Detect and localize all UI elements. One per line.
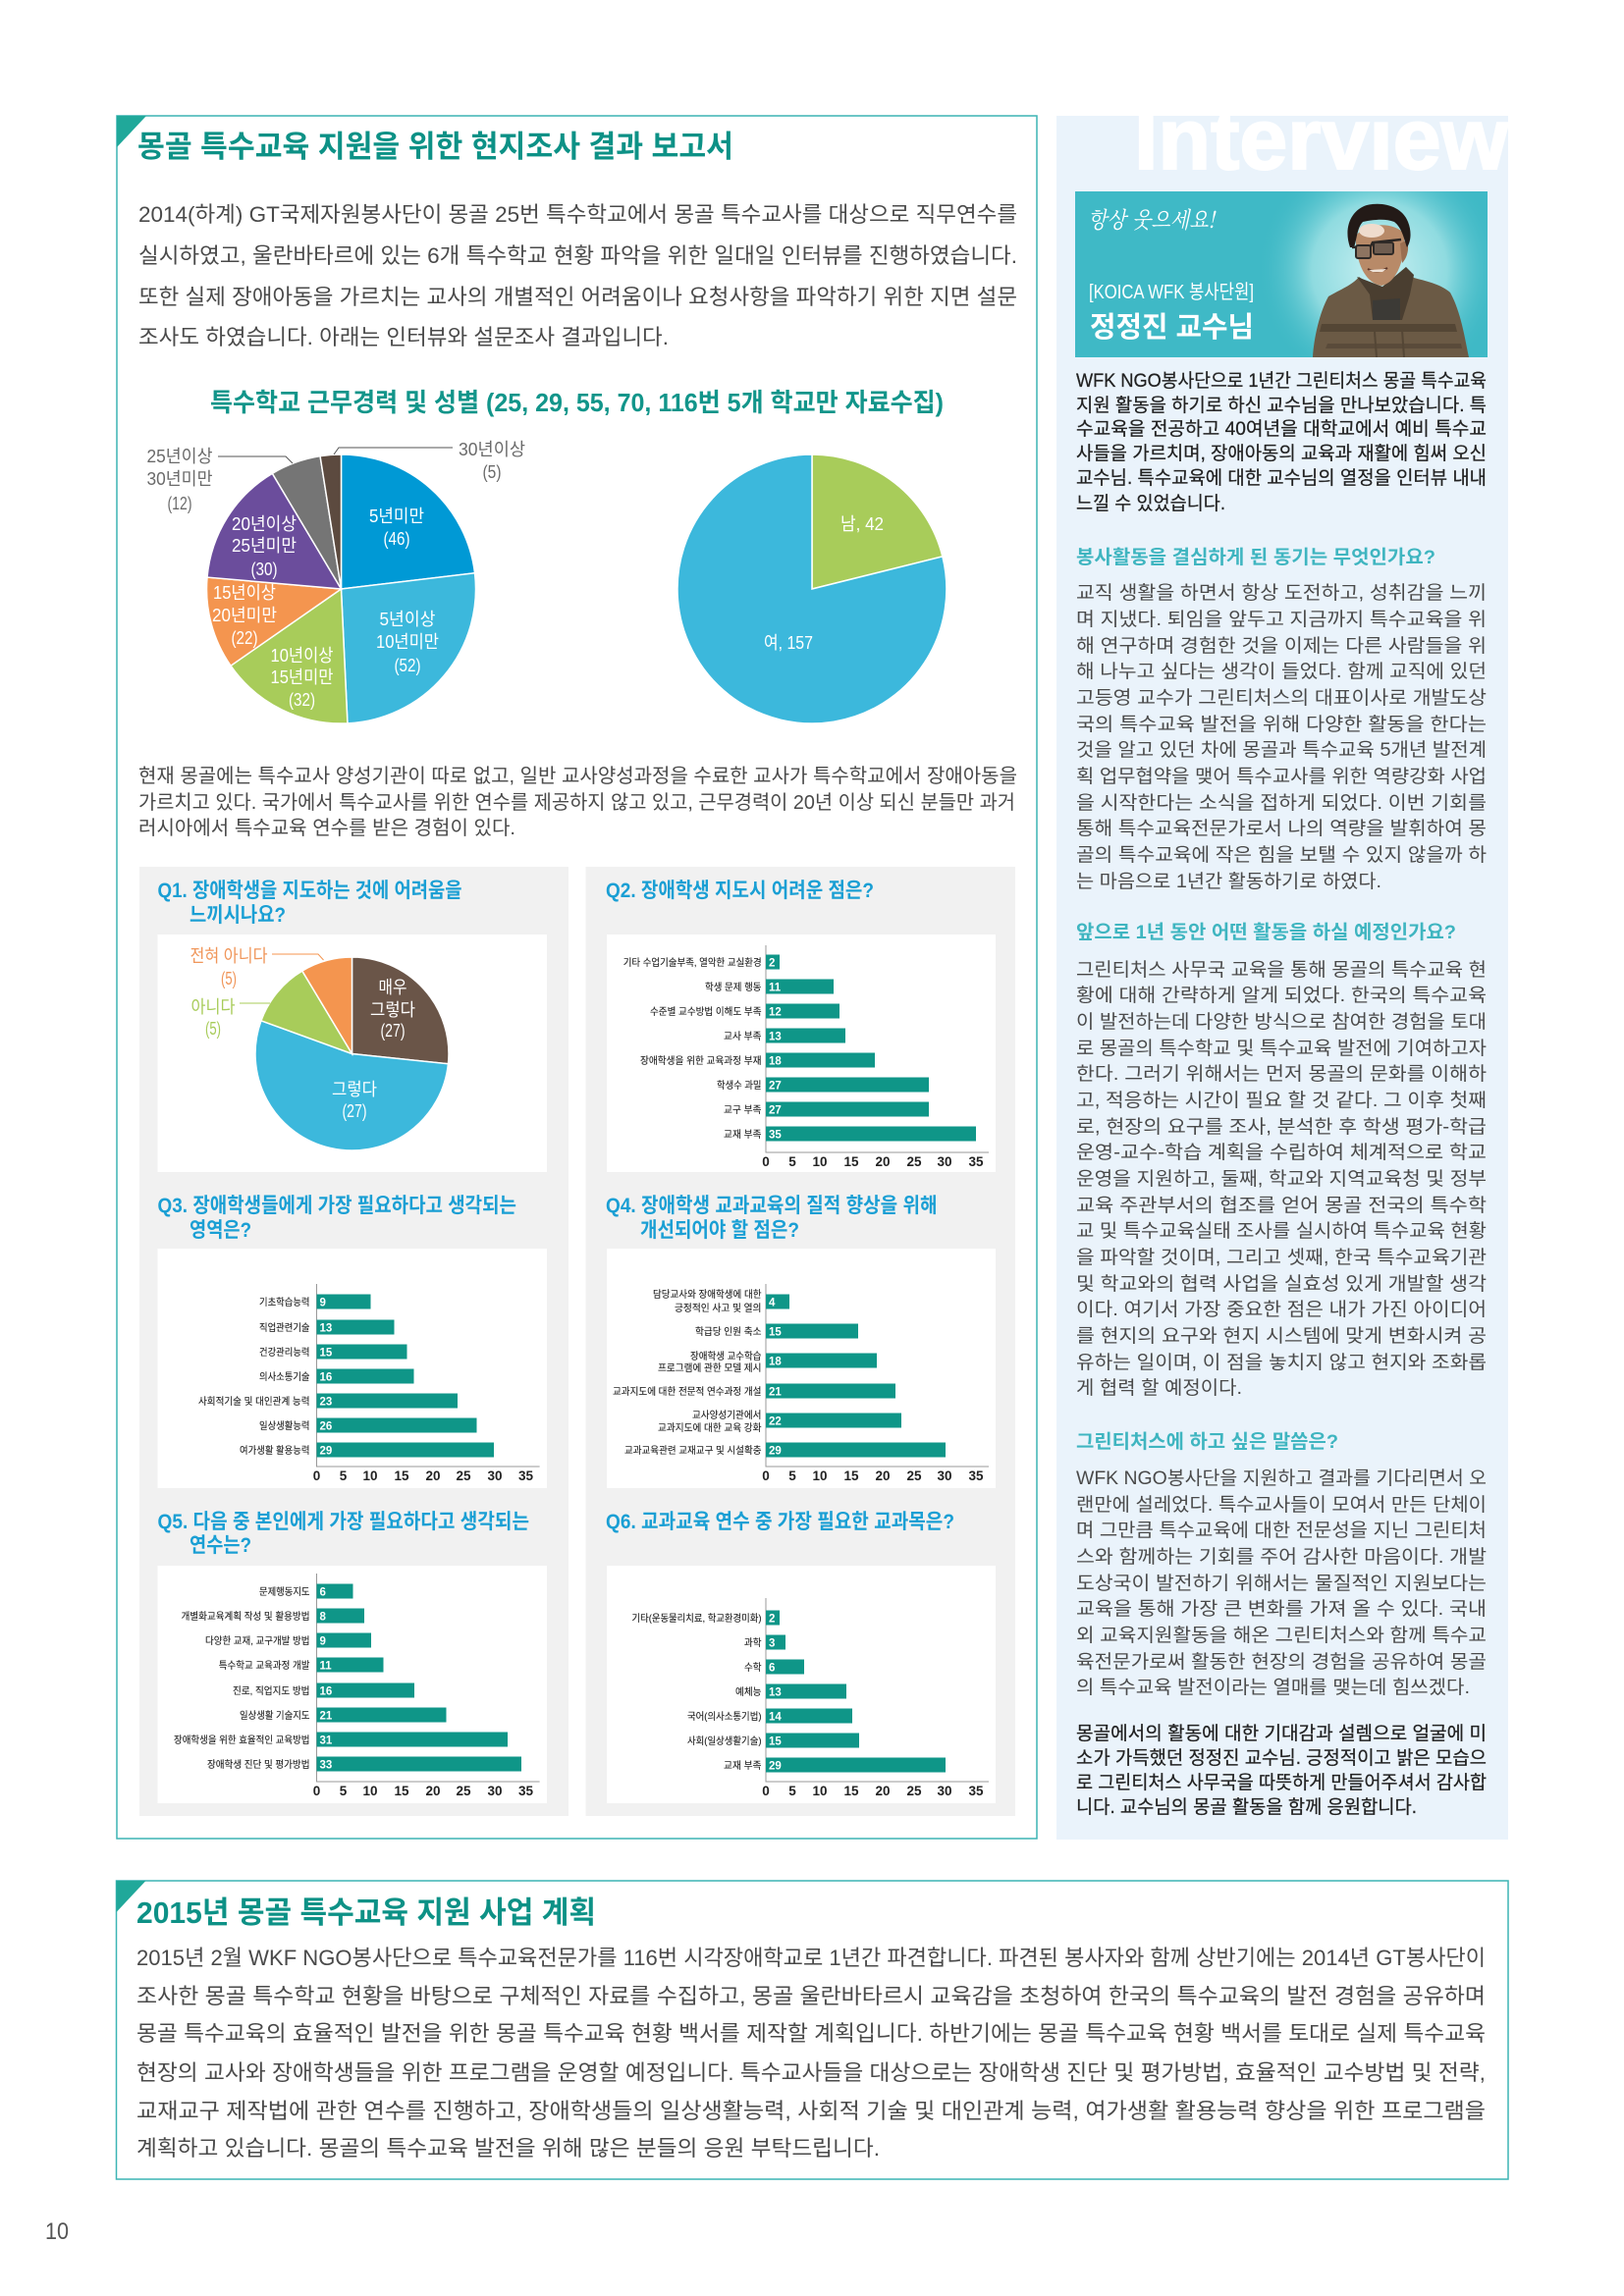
heading: message question: 그린티처스에 하고 싶은 말씀은? [1076, 1431, 1338, 1453]
text block: plans answer: 교육 주관부서의 협조를 얻어 몽골 전국의 특수학 [1076, 1195, 1487, 1216]
bar chart: Q6: 교재 부족 [724, 1760, 762, 1772]
bar chart: Q3: 16 [320, 1372, 332, 1384]
pie chart: years of service: 25년미만 [232, 536, 297, 556]
text block: motivation answer: 해 연구하며 경험한 것을 이제는 다른 사람들을 위 [1076, 635, 1487, 657]
bar chart: Q3: 15 [320, 1347, 333, 1359]
text block: motivation answer: 는 마음으로 1년간 활동하기로 하였다. [1076, 871, 1381, 892]
pie chart: difficulty: 전혀 아니다 [190, 946, 268, 966]
text block: plans answer: 그린티처스 사무국 교육을 통해 몽골의 특수교육 현 [1076, 959, 1487, 981]
pie chart: years of service: (22) [232, 628, 257, 648]
pie chart: years of service: (12) [167, 494, 192, 513]
bar chart: Q6: 15 [769, 1735, 782, 1747]
pie chart: difficulty: 아니다 [190, 997, 236, 1017]
text block: motivation answer: 것을 알고 있던 차에 몽골과 특수교육 5개년 발전계 [1076, 739, 1487, 761]
icon: portrait of professor [1313, 204, 1469, 357]
panel: interview sidebar [1056, 90, 1509, 1840]
bar chart: Q6: 5 [788, 1784, 796, 1798]
bar chart: Q6: 과학 [744, 1637, 762, 1649]
text block: plans answer: 이 발전하는데 다양한 방식으로 참여한 경험을 토대 [1076, 1011, 1487, 1033]
pie chart: years of service: 10년미만 [376, 632, 439, 652]
pie chart: gender: 남, 42 [840, 514, 884, 534]
bar chart: Q4: 18 [769, 1357, 782, 1368]
pie chart: years of service [147, 440, 525, 723]
bar chart: Q3: 건강관리능력 [259, 1347, 310, 1359]
bar chart: Q4: 29 [769, 1445, 782, 1457]
bar chart: Q4: 4 [769, 1298, 776, 1309]
bar chart: Q3: 15 [394, 1468, 409, 1483]
bar chart: Q2: 10 [812, 1154, 828, 1169]
text block: plans answer [1076, 959, 1487, 1399]
bar chart: Q3: 29 [320, 1445, 332, 1457]
bar chart: Q5: 다양한 교재, 교구개발 방법 [205, 1635, 310, 1647]
bar chart: Q3: 직업관련기술 [259, 1321, 310, 1334]
text block: interview intro: WFK NGO봉사단으로 1년간 그린티처스 몽골 특수교육 [1076, 370, 1487, 392]
bar chart: Q6: 25 [906, 1784, 922, 1798]
bar chart: Q4: 학급당 인원 축소 [695, 1326, 762, 1338]
text block: context paragraph: 러시아에서 특수교육 연수를 받은 경험이 있다. [138, 817, 515, 839]
text block: interview intro: 교수님. 특수교육에 대한 교수님의 열정을 인터뷰 내내 [1076, 467, 1487, 489]
bar chart: Q2 [623, 945, 989, 1169]
text block: message answer: 랜만에 설레었다. 특수교사들이 모여서 만든 단체이 [1076, 1494, 1487, 1516]
text block: interview intro: 지원 활동을 하기로 하신 교수님을 만나보았습니다. 특 [1076, 395, 1487, 416]
text block: plan details [136, 1946, 1486, 2161]
bar chart: Q3: 30 [487, 1468, 503, 1483]
question text [157, 1511, 529, 1557]
pie chart: years of service: (32) [289, 690, 315, 710]
bar chart: Q6 [632, 1598, 989, 1798]
bar chart: Q3: 13 [320, 1323, 332, 1335]
text block: motivation answer: 통해 특수교육전문가로서 나의 역량을 발휘하여 몽 [1076, 818, 1487, 839]
pie chart: gender [677, 454, 947, 723]
text block: plan details: 교재교구 제작법에 관한 연수를 진행하고, 장애학생들의 일상생활능력, 사회적 기술 및 대인관계 능력, 여가생활 활용능력 향상을 위한 프로그램을 [136, 2099, 1486, 2123]
bar chart: Q4: 30 [937, 1468, 952, 1483]
text block: message answer: 의 특수교육 발전이라는 열매를 맺는데 힘쓰겠다. [1076, 1677, 1470, 1698]
pie chart: years of service: 30년미만 [147, 469, 212, 489]
text block: message answer: 교육을 통해 가장 큰 변화를 가져 올 수 있다. 국내 [1076, 1598, 1487, 1620]
bar chart: Q2: 25 [906, 1154, 922, 1169]
bar chart: Q3: 여가생활 활용능력 [240, 1444, 310, 1457]
bar chart: Q5: 10 [362, 1784, 378, 1798]
text block: interview intro: 사들을 가르치며, 장애아동의 교육과 재활에 힘써 오신 [1076, 443, 1487, 464]
text block: intro: 2014(하계) GT국제자원봉사단이 몽골 25번 특수학교에서 몽골 특수교사를 대상으로 직무연수를 [138, 202, 1017, 227]
bar chart: Q5: 5 [340, 1784, 348, 1798]
bar chart: Q6: 기타(운동물리치료, 학교환경미화) [632, 1612, 762, 1625]
watermark: Interview: Interview [1134, 90, 1509, 187]
bar chart: Q4: 긍정적인 사고 및 열의 [675, 1303, 762, 1314]
bar chart: Q4: 5 [788, 1468, 796, 1483]
bar chart: Q5: 35 [518, 1784, 533, 1798]
text block: plans answer: 이다. 여기서 가장 중요한 점은 내가 가진 아이디어 [1076, 1299, 1487, 1320]
bar chart: Q5: 장애학생을 위한 효율적인 교육방법 [174, 1734, 310, 1746]
text block: plans answer: 한다. 그러기 위해서는 먼저 몽골의 문화를 이해하 [1076, 1063, 1487, 1085]
question text: Q1. 장애학생을 지도하는 것에 어려움을 [157, 880, 461, 902]
pie chart: years of service: 25년이상 [147, 447, 212, 466]
bar chart: Q6: 10 [812, 1784, 828, 1798]
bar chart: Q5: 특수학교 교육과정 개발 [219, 1660, 310, 1672]
bar chart: Q5: 9 [320, 1635, 326, 1647]
question text: Q3. 장애학생들에게 가장 필요하다고 생각되는 [157, 1195, 516, 1217]
bar chart: Q3: 20 [425, 1468, 441, 1483]
text block: closing note: 몽골에서의 활동에 대한 기대감과 설렘으로 얼굴에 미 [1076, 1723, 1487, 1744]
bar chart: Q2: 18 [769, 1056, 782, 1068]
text block: plans answer: 고, 적응하는 시간이 필요 할 것 같다. 그 이후 첫째 [1076, 1090, 1487, 1111]
bar chart: Q3 [198, 1284, 540, 1483]
bar chart: Q3: 5 [340, 1468, 348, 1483]
text block: interview intro: 느낄 수 있었습니다. [1076, 493, 1225, 514]
text block: plans answer: 로 몽골의 특수학교 및 특수교육 발전에 기여하고자 [1076, 1038, 1487, 1059]
bar chart: Q4: 10 [812, 1468, 828, 1483]
bar chart: Q4: 담당교사와 장애학생에 대한 [653, 1289, 762, 1301]
bar chart: Q6: 35 [968, 1784, 984, 1798]
pie chart: years of service: (30) [251, 560, 277, 579]
bar chart: Q5: 16 [320, 1686, 332, 1698]
bar chart: Q6: 3 [769, 1637, 775, 1649]
question text: Q2. 장애학생 지도시 어려운 점은? [606, 880, 874, 902]
pie chart: difficulty: (5) [221, 969, 237, 988]
bar chart: Q3: 일상생활능력 [259, 1419, 310, 1432]
heading: plan title: 2015년 몽골 특수교육 지원 사업 계획 [136, 1896, 596, 1930]
bar chart: Q2: 장애학생을 위한 교육과정 부재 [640, 1054, 762, 1067]
bar chart: Q6: 0 [762, 1784, 770, 1798]
bar chart: Q5: 문제행동지도 [259, 1586, 310, 1598]
text block: intro: 실시하였고, 울란바타르에 있는 6개 특수학교 현황 파악을 위한 일대일 인터뷰를 진행하였습니다. [138, 243, 1017, 268]
bar chart: Q2: 27 [769, 1105, 782, 1117]
bar chart: Q5: 25 [456, 1784, 471, 1798]
heading: report title: 몽골 특수교육 지원을 위한 현지조사 결과 보고서 [137, 130, 733, 164]
question text: Q5. 다음 중 본인에게 가장 필요하다고 생각되는 [157, 1511, 529, 1533]
bar chart: Q2: 학생수 과밀 [717, 1080, 762, 1092]
bar chart: Q4: 15 [769, 1327, 782, 1339]
bar chart: Q2: 13 [769, 1031, 782, 1042]
bar chart: Q6: 13 [769, 1686, 782, 1698]
bar chart: Q5: 개별화교육계획 작성 및 활용방법 [182, 1610, 310, 1623]
question text [606, 1195, 937, 1242]
bar chart: Q6: 국어(의사소통기법) [687, 1711, 762, 1723]
bar chart: Q5: 21 [320, 1710, 333, 1722]
text block: intro [138, 202, 1017, 349]
text block: context paragraph: 현재 몽골에는 특수교사 양성기관이 따로 없고, 일반 교사양성과정을 수료한 교사가 특수학교에서 장애아동을 [138, 765, 1017, 787]
bar chart: Q5: 일상생활 기술지도 [240, 1709, 310, 1722]
text block: intro: 조사도 하였습니다. 아래는 인터뷰와 설문조사 결과입니다. [138, 325, 669, 349]
text block: plans answer: 및 학교와의 협력 사업을 실효성 있게 개발할 생각 [1076, 1273, 1487, 1295]
bar chart: Q2: 11 [769, 982, 782, 993]
pie chart: years of service: (46) [383, 529, 410, 549]
text block: motivation answer: 을 시작한다는 소식을 접하게 되었다. 이번 기회를 [1076, 792, 1487, 814]
bar chart: Q5: 0 [313, 1784, 320, 1798]
text block: closing note: 니다. 교수님의 몽골 활동을 함께 응원합니다. [1076, 1796, 1417, 1818]
pie chart: years of service: (52) [395, 656, 420, 675]
role label: [KOICA WFK 봉사단원] [1089, 281, 1254, 303]
question text [157, 880, 461, 927]
panel: Q1 [139, 867, 568, 1816]
pie chart: years of service: (5) [483, 462, 501, 482]
text block: intro: 또한 실제 장애아동을 가르치는 교사의 개별적인 어려움이나 요청사항을 파악하기 위한 지면 설문 [138, 285, 1017, 309]
text block: message answer [1076, 1468, 1487, 1698]
pie chart: years of service: 5년이상 [379, 610, 436, 629]
bar chart: Q4: 교과교육관련 교재교구 및 시설확충 [624, 1445, 762, 1457]
bar chart: Q2: 수준별 교수방법 이해도 부족 [650, 1005, 762, 1018]
bar chart: Q2: 15 [843, 1154, 859, 1169]
bar chart: Q2: 학생 문제 행동 [705, 982, 762, 993]
pie chart: difficulty: (27) [342, 1101, 367, 1121]
question text: 개선되어야 할 점은? [640, 1219, 799, 1242]
text block: motivation answer: 획 업무협약을 맺어 특수교사를 위한 역량강화 사업 [1076, 766, 1487, 787]
text block: interview intro: 수교육을 전공하고 40여년을 대학교에서 예비 특수교 [1076, 418, 1487, 440]
text block: motivation answer: 교직 생활을 하면서 항상 도전하고, 성취감을 느끼 [1076, 582, 1487, 604]
text block: message answer: 스와 함께하는 기회를 주어 감사한 마음이다. 개발 [1076, 1546, 1487, 1568]
text block: plans answer: 황에 대해 간략하게 알게 되었다. 한국의 특수교육 [1076, 985, 1487, 1006]
text block: plans answer: 로, 현장의 요구를 조사, 분석한 후 학생 평가-학급 [1076, 1116, 1487, 1138]
handwritten quote: 항상 웃으세요! [1088, 202, 1217, 235]
text block: closing note [1076, 1723, 1487, 1818]
bar chart: Q5: 11 [320, 1661, 332, 1673]
bar chart: Q5: 30 [487, 1784, 503, 1798]
bar chart: Q6: 2 [769, 1614, 775, 1626]
bar chart: Q6: 사회(일상생활기술) [687, 1735, 762, 1747]
bar chart: Q6: 20 [875, 1784, 891, 1798]
bar chart: Q6: 수학 [744, 1662, 762, 1674]
bar chart: Q3: 23 [320, 1396, 332, 1408]
bar chart: Q4: 프로그램에 관한 모델 제시 [658, 1362, 762, 1374]
bar chart: Q5: 장애학생 진단 및 평가방법 [207, 1759, 310, 1771]
bar chart: Q5: 31 [320, 1735, 333, 1747]
panel: Q2 [585, 867, 1015, 1816]
heading: motivation question: 봉사활동을 결심하게 된 동기는 무엇인가요? [1076, 547, 1435, 568]
text block: closing note: 로 그린티처스 사무국을 따뜻하게 만들어주셔서 감사합 [1076, 1772, 1487, 1793]
bar chart: Q4: 교과지도에 대한 전문적 연수과정 개설 [613, 1386, 762, 1398]
bar chart: Q2: 27 [769, 1080, 782, 1092]
bar chart: Q5: 33 [320, 1759, 332, 1771]
bar chart: Q2: 교구 부족 [724, 1104, 762, 1116]
pie chart: years of service: 15년이상 [213, 583, 276, 603]
text block: motivation answer: 골의 특수교육에 작은 힘을 보탤 수 있지 않을까 하 [1076, 844, 1487, 866]
text block: plan details: 계획하고 있습니다. 몽골의 특수교육 발전을 위해 많은 분들의 응원 부탁드립니다. [136, 2136, 880, 2161]
bar chart: Q4: 35 [968, 1468, 984, 1483]
text block: plans answer: 게 협력 할 예정이다. [1076, 1377, 1242, 1399]
pie chart: years of service: 15년미만 [271, 667, 334, 687]
bar chart: Q5: 진로, 직업지도 방법 [233, 1684, 310, 1697]
bar chart: Q3: 의사소통기술 [259, 1371, 310, 1383]
bar chart: Q2: 0 [762, 1154, 770, 1169]
bar chart: Q4: 교사양성기관에서 [692, 1410, 762, 1421]
pie chart: difficulty: (5) [205, 1019, 221, 1039]
text block: message answer: 육전문가로써 활동한 현장의 경험을 공유하여 몽골 [1076, 1651, 1487, 1673]
bar chart: Q6: 14 [769, 1712, 782, 1724]
bar chart: Q4: 0 [762, 1468, 770, 1483]
bar chart: Q3: 10 [362, 1468, 378, 1483]
text block: motivation answer [1076, 582, 1487, 892]
bar chart: Q3: 0 [313, 1468, 320, 1483]
question text: Q6. 교과교육 연수 중 가장 필요한 교과목은? [606, 1511, 954, 1533]
text block: plan details: 조사한 몽골 특수학교 현황을 바탕으로 구체적인 자료를 수집하고, 몽골 울란바타르시 교육감을 초청하여 한국의 특수교육의 발전 경험을 공유하며 [136, 1984, 1486, 2008]
text block: context paragraph [138, 765, 1017, 839]
bar chart: Q2: 2 [769, 958, 775, 970]
text block: closing note: 소가 가득했던 정정진 교수님. 긍정적이고 밝은 모습으 [1076, 1747, 1487, 1769]
bar chart: Q2: 20 [875, 1154, 891, 1169]
panel: Q5 [157, 1511, 547, 1803]
pie chart: difficulty [190, 946, 449, 1150]
question text: Q4. 장애학생 교과교육의 질적 향상을 위해 [606, 1195, 937, 1217]
pie chart: years of service: 20년미만 [212, 606, 277, 625]
bar chart: Q4: 교과지도에 대한 교육 강화 [658, 1422, 762, 1434]
bar chart: Q6: 15 [843, 1784, 859, 1798]
text block: plans answer: 을 파악할 것이며, 그리고 셋째, 한국 특수교육기관 [1076, 1247, 1487, 1268]
bar chart: Q2: 30 [937, 1154, 952, 1169]
text block: plans answer: 운영을 지원하고, 둘째, 학교와 지역교육청 및 정부 [1076, 1168, 1487, 1190]
text block: message answer: 외 교육지원활동을 해온 그린티처스와 함께 특수교 [1076, 1625, 1487, 1646]
bar chart: Q4: 25 [906, 1468, 922, 1483]
text block: plans answer: 운영-교수-학습 계획을 수립하여 체계적으로 학교 [1076, 1142, 1487, 1163]
pie chart: difficulty: 매우 [379, 978, 406, 997]
pie chart: years of service: 30년이상 [459, 440, 525, 459]
icon: corner triangle [116, 1881, 145, 1912]
bar chart: Q6: 29 [769, 1761, 782, 1773]
bar chart: Q5: 6 [320, 1586, 326, 1598]
bar chart: Q4: 15 [843, 1468, 859, 1483]
bar chart: Q3: 기초학습능력 [259, 1297, 310, 1308]
bar chart: Q5: 8 [320, 1612, 326, 1624]
panel: field survey report [117, 116, 1037, 1839]
bar chart: Q6: 30 [937, 1784, 952, 1798]
bar chart: Q6: 6 [769, 1663, 775, 1675]
pie chart: difficulty: 그렇다 [370, 1000, 415, 1020]
bar chart: Q3: 25 [456, 1468, 471, 1483]
text block: motivation answer: 해 나누고 싶다는 생각이 들었다. 함께 교직에 있던 [1076, 661, 1487, 682]
panel: Q4 [606, 1195, 996, 1488]
bar chart: Q4: 21 [769, 1386, 782, 1398]
bar chart: Q2: 교사 부족 [724, 1031, 762, 1042]
text block: motivation answer: 며 지냈다. 퇴임을 앞두고 지금까지 특수교육을 위 [1076, 609, 1487, 630]
heading: plans question: 앞으로 1년 동안 어떤 활동을 하실 예정인가요? [1076, 922, 1456, 943]
text block: plans answer: 교 및 특수교육실태 조사를 실시하여 특수교육 현황 [1076, 1220, 1487, 1242]
bar chart: Q5 [174, 1574, 540, 1798]
bar chart: Q3: 사회적기술 및 대인관계 능력 [198, 1396, 310, 1408]
panel: Q3 [157, 1195, 547, 1488]
bar chart: Q2: 교재 부족 [724, 1129, 762, 1141]
bar chart: Q4: 22 [769, 1415, 782, 1427]
bar chart: Q4 [613, 1284, 989, 1483]
bar chart: Q2: 기타 수업기술부족, 열악한 교실환경 [623, 956, 762, 969]
bar chart: Q4: 20 [875, 1468, 891, 1483]
pie chart: years of service: 5년미만 [369, 507, 424, 526]
pie chart: gender: 여, 157 [764, 633, 813, 653]
text block: message answer: 며 그만큼 특수교육에 대한 전문성을 지닌 그린티처 [1076, 1520, 1487, 1541]
bar chart: Q3: 26 [320, 1421, 332, 1433]
pie chart: years of service: 20년이상 [232, 514, 297, 534]
text block: plan details: 몽골 특수교육의 효율적인 발전을 위한 몽골 특수교육 현황 백서를 제작할 계획입니다. 하반기에는 몽골 특수교육 현황 백서를 토대로 실제 특수교육 [136, 2021, 1486, 2046]
pie chart: years of service: 10년이상 [271, 646, 334, 666]
bar chart: Q3: 9 [320, 1298, 326, 1309]
text block: motivation answer: 국의 특수교육 발전을 위해 다양한 활동을 한다는 [1076, 714, 1487, 735]
text block: context paragraph: 가르치고 있다. 국가에서 특수교사를 위한 연수를 제공하지 않고 있고, 근무경력이 20년 이상 되신 분들만 과거 [138, 791, 1015, 814]
question text: 느끼시나요? [189, 904, 286, 927]
bar chart: Q5: 20 [425, 1784, 441, 1798]
bar chart: Q4: 장애학생 교수학습 [690, 1351, 762, 1362]
bar chart: Q3: 35 [518, 1468, 533, 1483]
page number: 10 [45, 2218, 69, 2245]
text block: message answer: 도상국이 발전하기 위해서는 물질적인 지원보다는 [1076, 1573, 1487, 1594]
text block: plan details: 2015년 2월 WKF NGO봉사단으로 특수교육전문가를 116번 시각장애학교로 1년간 파견합니다. 파견된 봉사자와 함께 상반기에는 2014년 GT봉사단이 [136, 1946, 1486, 1970]
bar chart: Q2: 35 [769, 1129, 782, 1141]
panel: 2015 plan [116, 1881, 1508, 2179]
bar chart: Q5: 15 [394, 1784, 409, 1798]
text block: motivation answer: 고등영 교수가 그린티처스의 대표이사로 개발도상 [1076, 687, 1487, 709]
bar chart: Q2: 5 [788, 1154, 796, 1169]
text block: interview intro [1076, 370, 1487, 514]
pie chart: difficulty: (27) [381, 1021, 405, 1041]
text block: plans answer: 를 현지의 요구와 현지 시스템에 맞게 변화시켜 공 [1076, 1325, 1487, 1347]
name: 정정진 교수님 [1090, 311, 1254, 344]
bar chart: Q2: 12 [769, 1007, 782, 1019]
bar chart: Q6: 예체능 [735, 1686, 762, 1698]
question text: 연수는? [189, 1534, 251, 1557]
text block: plan details: 현장의 교사와 장애학생들을 위한 프로그램을 운영할 예정입니다. 특수교사들을 대상으로는 장애학생 진단 및 평가방법, 효율적인 교수방법 및 전략, [136, 2060, 1486, 2085]
text block: message answer: WFK NGO봉사단을 지원하고 결과를 기다리면서 오 [1076, 1468, 1487, 1489]
bar chart: Q2: 35 [968, 1154, 984, 1169]
icon: corner triangle [117, 116, 146, 147]
question text [157, 1195, 516, 1242]
heading: chart title: 특수학교 근무경력 및 성별 (25, 29, 55, 70, 116번 5개 학교만 자료수집) [210, 388, 944, 417]
banner: interviewee [1075, 191, 1488, 357]
question text: 영역은? [189, 1219, 251, 1242]
text block: plans answer: 유하는 일이며, 이 점을 놓치지 않고 현지와 조화롭 [1076, 1352, 1487, 1373]
pie chart: difficulty: 그렇다 [332, 1080, 377, 1099]
panel: Q6 [606, 1511, 996, 1803]
